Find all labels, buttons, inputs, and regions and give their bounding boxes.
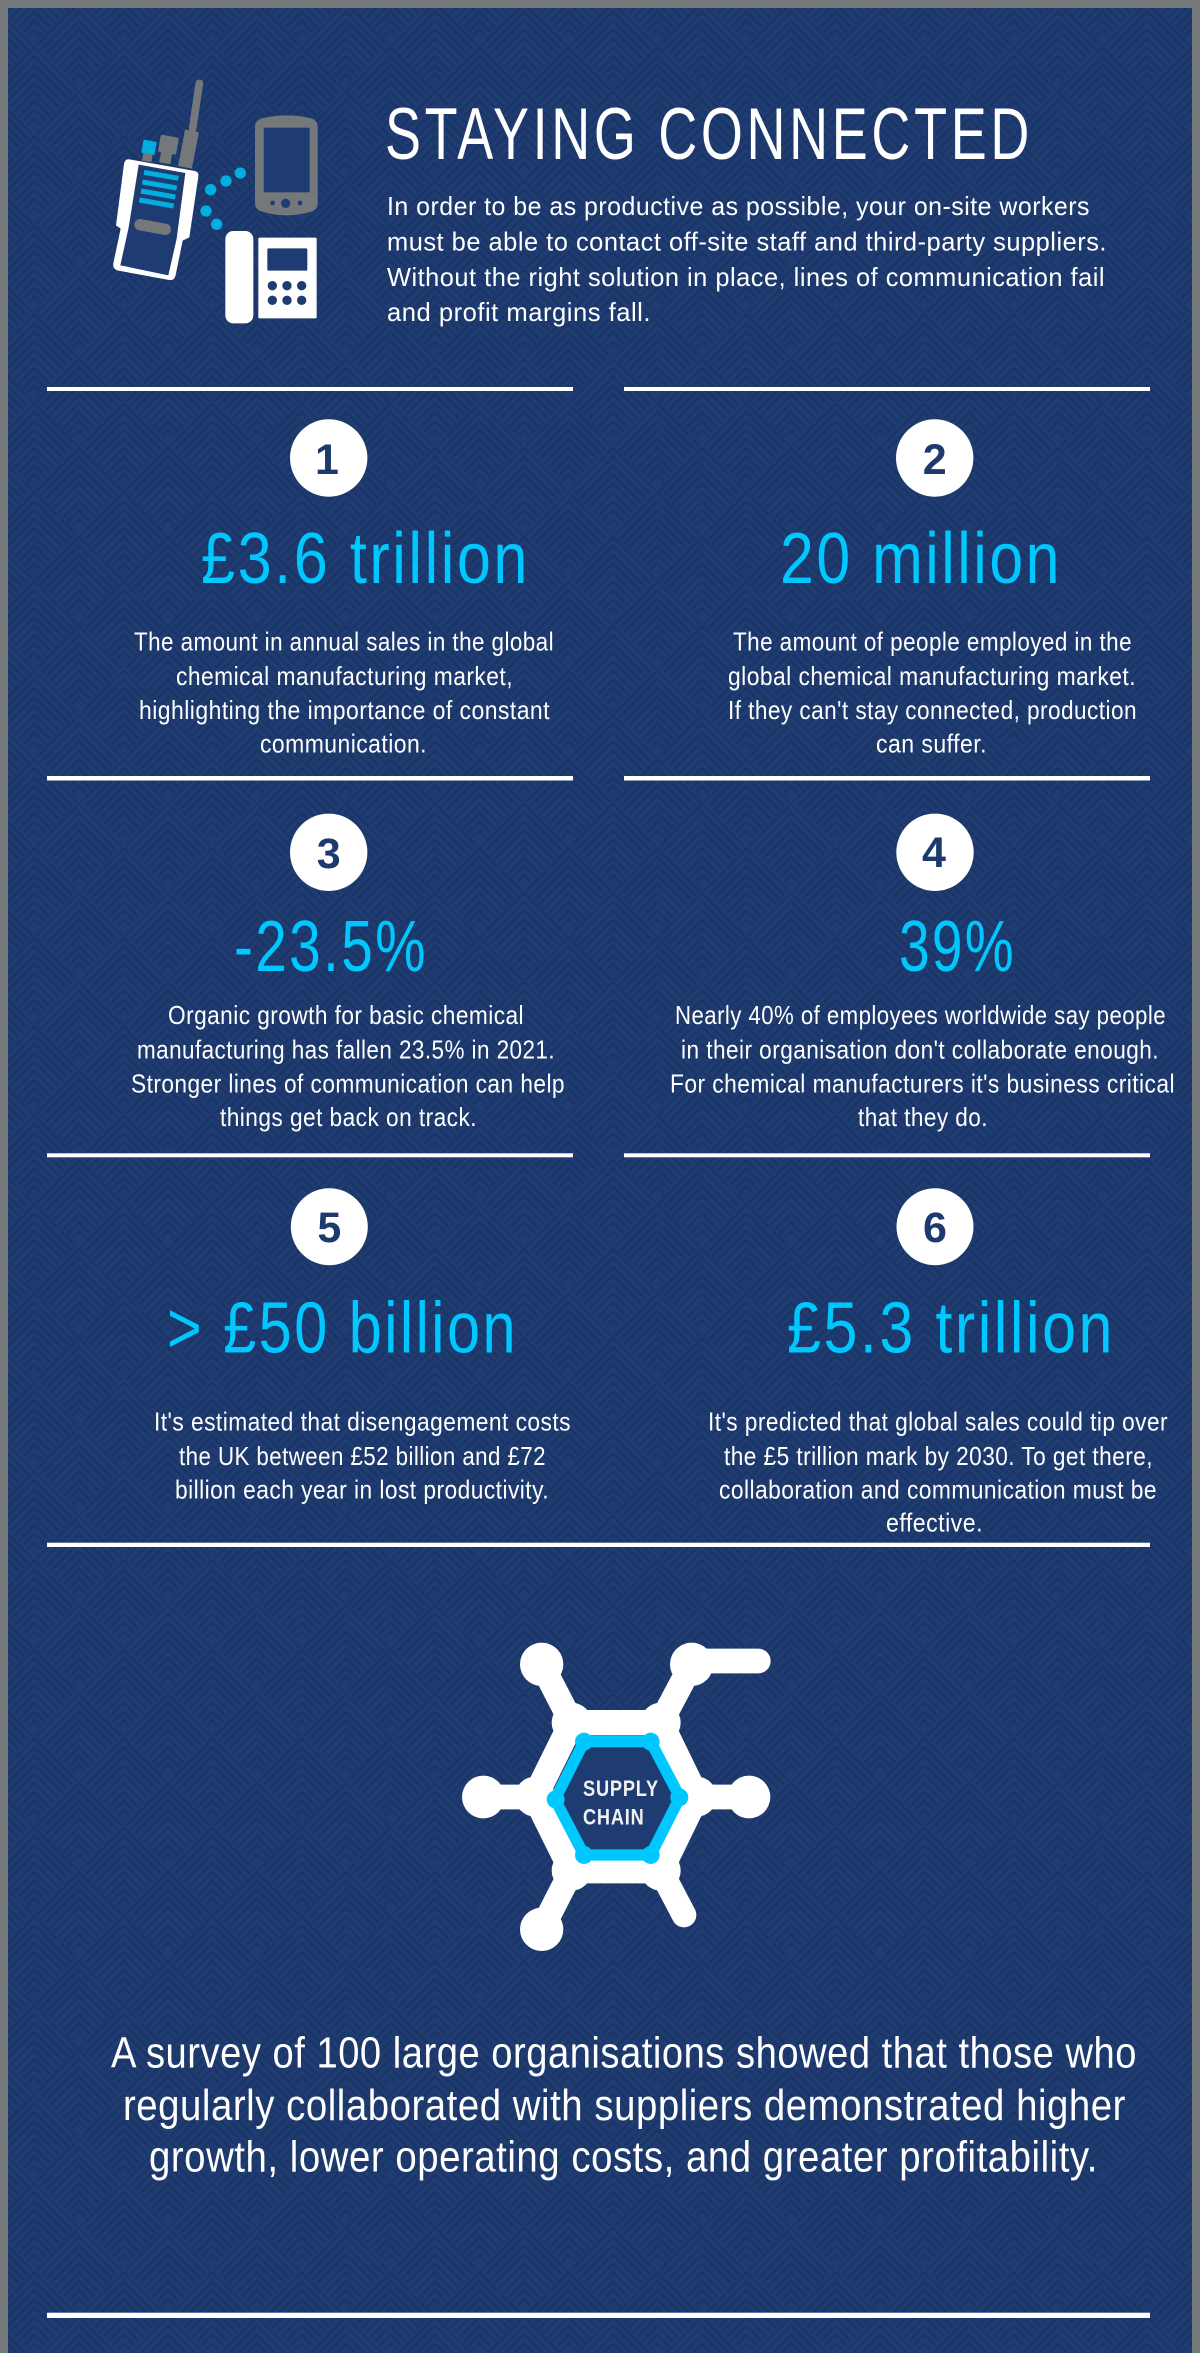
intro text: In order to be as productive as possible, your on-site workers bbox=[387, 193, 1090, 221]
number badge 2 bbox=[896, 419, 973, 497]
stat description 2: global chemical manufacturing market. bbox=[728, 663, 1136, 691]
panel: stat 6 bbox=[708, 1188, 1168, 1538]
stat value 2: 20 million bbox=[780, 519, 1062, 599]
panel: stat 5 bbox=[154, 1188, 571, 1504]
number badge 4: 4 bbox=[922, 829, 946, 877]
number badge 4 bbox=[896, 814, 974, 891]
intro text: must be able to contact off-site staff and third-party suppliers. bbox=[387, 228, 1107, 256]
icon: supply chain molecule bbox=[462, 1643, 770, 1951]
icon: two-way radio bbox=[113, 83, 199, 280]
number badge 3 bbox=[290, 814, 367, 891]
survey statement: growth, lower operating costs, and greater profitability. bbox=[149, 2134, 1098, 2182]
stat description 1 bbox=[134, 629, 554, 758]
stat description 6: effective. bbox=[886, 1510, 983, 1538]
stat description 4 bbox=[670, 1002, 1175, 1132]
stat description 1: highlighting the importance of constant bbox=[139, 697, 550, 725]
stat value 4: 39% bbox=[899, 907, 1016, 987]
stat description 1: communication. bbox=[260, 730, 427, 758]
intro text: and profit margins fall. bbox=[387, 299, 651, 327]
number badge 6 bbox=[896, 1188, 974, 1265]
survey statement bbox=[111, 2030, 1137, 2182]
icon: supply chain molecule: SUPPLY bbox=[583, 1776, 659, 1801]
number badge 1: 1 bbox=[315, 436, 339, 484]
stat description 5: billion each year in lost productivity. bbox=[175, 1476, 549, 1504]
stat value 6: £5.3 trillion bbox=[787, 1288, 1115, 1368]
number badge 5 bbox=[291, 1188, 368, 1265]
stat description 3 bbox=[131, 1002, 565, 1132]
icon: signal dots bbox=[200, 167, 246, 230]
stat description 1: The amount in annual sales in the global bbox=[134, 629, 554, 657]
stat description 5: It's estimated that disengagement costs bbox=[154, 1409, 571, 1437]
stat value 1: £3.6 trillion bbox=[201, 519, 530, 599]
stat description 5 bbox=[154, 1409, 571, 1504]
stat value 3: -23.5% bbox=[234, 907, 428, 987]
stat description 2: The amount of people employed in the bbox=[733, 629, 1132, 657]
stat description 3: manufacturing has fallen 23.5% in 2021. bbox=[137, 1036, 555, 1064]
stat description 1: chemical manufacturing market, bbox=[176, 663, 513, 691]
panel: stat 3 bbox=[131, 814, 565, 1132]
stat description 2 bbox=[728, 629, 1137, 758]
icon: supply chain molecule: CHAIN bbox=[583, 1804, 644, 1829]
intro text: Without the right solution in place, lines of communication fail bbox=[387, 264, 1105, 292]
stat description 6: collaboration and communication must be bbox=[719, 1476, 1157, 1504]
stat value 5: > £50 billion bbox=[167, 1288, 518, 1368]
number badge 6: 6 bbox=[923, 1204, 947, 1252]
stat description 5: the UK between £52 billion and £72 bbox=[179, 1443, 546, 1471]
stat description 6: the £5 trillion mark by 2030. To get there, bbox=[724, 1443, 1153, 1471]
icon: desk phone bbox=[225, 231, 317, 323]
stat description 4: that they do. bbox=[858, 1104, 988, 1132]
number badge 1 bbox=[290, 419, 367, 497]
number badge 3: 3 bbox=[317, 830, 341, 878]
number badge 5: 5 bbox=[317, 1204, 341, 1252]
panel: stat 2 bbox=[728, 419, 1137, 758]
icon: smartphone bbox=[255, 115, 318, 215]
stat description 6 bbox=[708, 1409, 1168, 1538]
intro text bbox=[387, 193, 1107, 327]
header icon: radio, smartphone and desk phone bbox=[113, 83, 318, 323]
number badge 2: 2 bbox=[923, 436, 947, 484]
panel: stat 4 bbox=[670, 814, 1175, 1132]
stat description 3: things get back on track. bbox=[220, 1104, 477, 1132]
stat description 3: Stronger lines of communication can help bbox=[131, 1070, 565, 1098]
stat description 2: can suffer. bbox=[876, 730, 987, 758]
panel: stat 1 bbox=[134, 419, 554, 758]
stat description 3: Organic growth for basic chemical bbox=[168, 1002, 524, 1030]
stat description 2: If they can't stay connected, production bbox=[728, 697, 1137, 725]
